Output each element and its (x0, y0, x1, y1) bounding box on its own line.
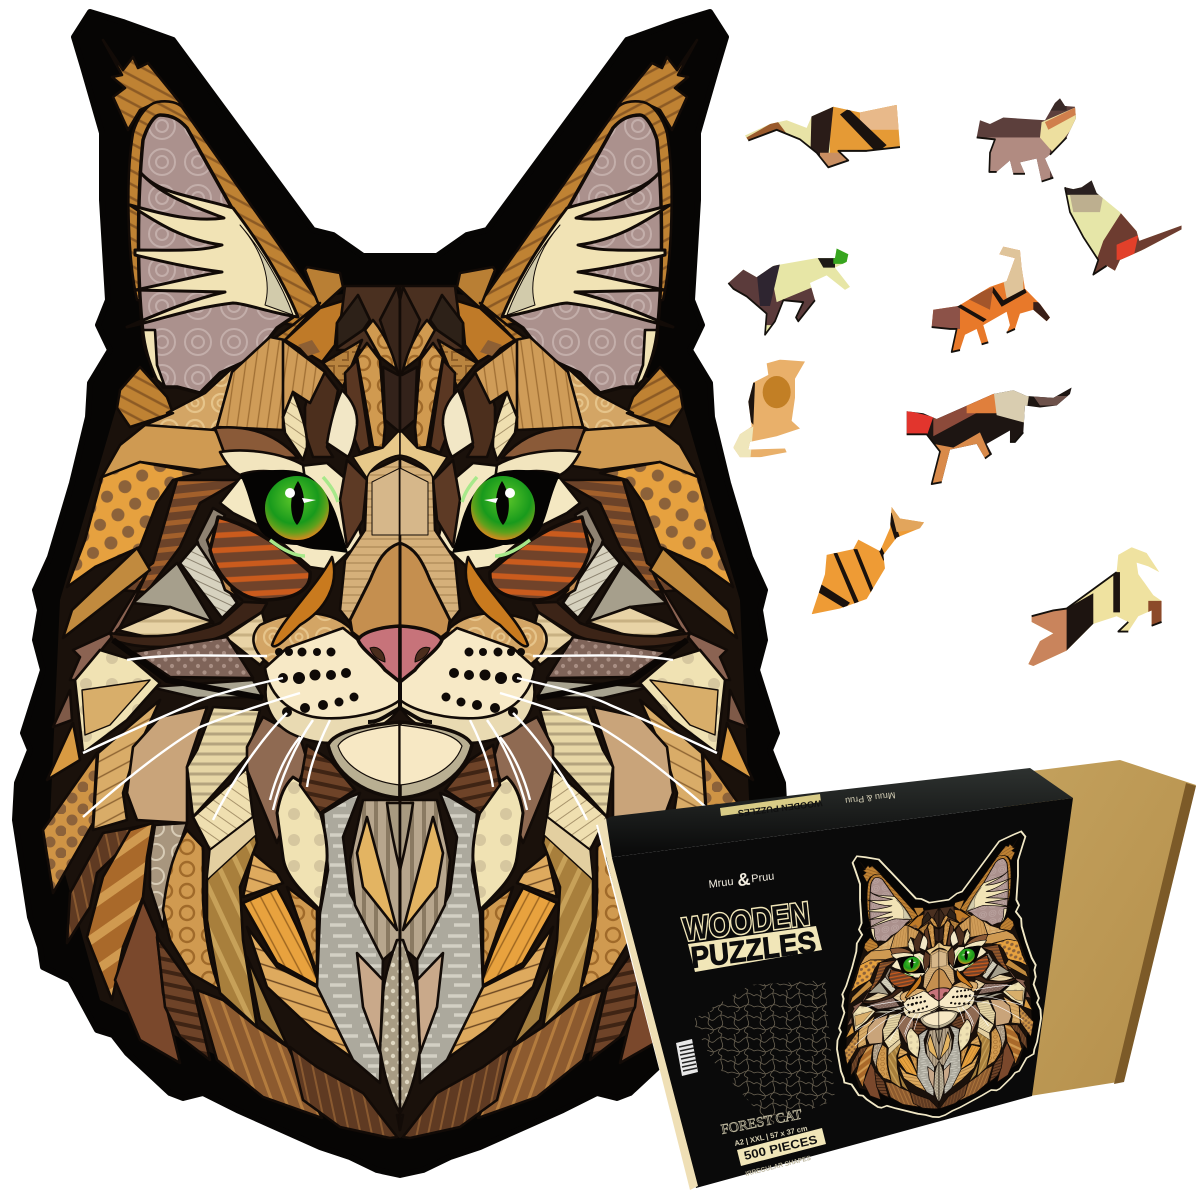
swirl orange leaf (287, 887, 317, 973)
cream tuft join (207, 817, 256, 880)
mauve fur strip (70, 573, 147, 680)
mouth line (368, 682, 400, 722)
eye outline (240, 470, 348, 553)
spotted side (67, 462, 200, 587)
black cheek line (113, 640, 263, 698)
interior dark base (50, 286, 400, 1138)
muzzle cream (265, 628, 400, 718)
kraft right edge (1114, 783, 1196, 1084)
brow fan (215, 427, 298, 458)
crown cream (353, 432, 400, 478)
muzzle top swirl (253, 613, 357, 665)
ear tip fur (103, 40, 182, 130)
brown stripe band (117, 480, 240, 592)
right half of cat face (mirrored) (400, 40, 757, 1138)
black puzzle outline (15, 12, 785, 1175)
highlight (285, 488, 295, 498)
bottom brown tip (397, 1115, 400, 1130)
box art cat (837, 828, 1041, 1133)
kraft sleeve (1000, 760, 1196, 1096)
cat art (837, 828, 1041, 1133)
ear cream tufts (127, 172, 298, 327)
nose leather (358, 626, 400, 682)
forehead cream leaf (327, 390, 357, 457)
orange leaf (47, 723, 80, 780)
tan stripe lower (283, 340, 325, 417)
piece: orange cat tail up (930, 245, 1053, 356)
orange mottled fur (285, 298, 352, 362)
pieces badge (737, 1128, 826, 1166)
green lid glow (270, 477, 338, 556)
olive stripe leaf (207, 822, 257, 1027)
orange centre swirl (357, 817, 397, 930)
left half of cat face (43, 40, 400, 1138)
dark cheek band (110, 602, 267, 647)
side fur under ear (117, 367, 173, 427)
thin olive (247, 957, 288, 1047)
forehead maze tan band (265, 303, 320, 345)
pale grey stripes (180, 543, 237, 618)
mauve small leaf (53, 690, 72, 727)
grey cheek (133, 563, 213, 623)
dotted bottom (380, 940, 400, 1113)
ear tuft shade (240, 225, 293, 315)
grey swirl leaf (150, 823, 187, 927)
cream tuft (193, 768, 253, 850)
ampersand: & (736, 869, 751, 890)
lower lip (266, 657, 400, 743)
box white halo (596, 764, 1198, 1196)
lid brand: Mruu & Pruu (845, 790, 896, 806)
big dark forehead lobe (305, 373, 338, 457)
barcode (676, 1039, 698, 1076)
side nose brown (340, 460, 367, 547)
inner ear (138, 115, 293, 393)
piece: crouching cat (745, 105, 900, 166)
cat puzzle illustration (15, 12, 785, 1175)
maze patch (323, 340, 362, 387)
grey lower cheek (150, 680, 263, 698)
dark lobe near centre (345, 360, 370, 453)
column upper pattern (372, 468, 400, 535)
piece edges (728, 130, 1162, 632)
orange brown leaf (87, 823, 153, 1000)
taupe centre stripes (350, 800, 400, 960)
pupil (291, 481, 304, 525)
eye surround cream (220, 463, 363, 570)
dark brown leaf (115, 900, 180, 1063)
size text: A2 | XXL | 57 x 37 cm (734, 1124, 809, 1148)
striped band (243, 853, 283, 897)
piece: stretching cat (1028, 547, 1162, 666)
centre swirl stripe (357, 343, 385, 448)
cream dotted leaf (75, 650, 160, 753)
tan rim patch (207, 517, 242, 600)
chin rim (328, 722, 400, 798)
barcode bars (679, 1044, 697, 1071)
lower forehead band (100, 425, 235, 480)
plain tan fur (127, 707, 207, 823)
bottom dark fan (290, 1047, 397, 1138)
piece: black cat (906, 388, 1072, 483)
piece: fish (812, 507, 924, 614)
big swirl leaf (163, 830, 220, 990)
forest cat title: FOREST CAT (720, 1107, 804, 1138)
headline line 2: PUZZLES (689, 926, 817, 975)
piece: rat (733, 360, 805, 458)
mauve chest band (247, 717, 307, 843)
highlight small (302, 498, 316, 503)
striped tan fur (93, 700, 160, 830)
tan strip at lower leaf (82, 680, 150, 735)
orange streak (272, 557, 334, 646)
lower mauve leaf (357, 953, 383, 1053)
ear lower sliver (143, 330, 165, 387)
grey rim round patch (197, 508, 237, 618)
product box (596, 760, 1198, 1196)
striped dark leaf (157, 937, 210, 1060)
ear rim (128, 101, 320, 325)
barcode plate (676, 1039, 698, 1076)
grey chest band (317, 793, 383, 1083)
crown dark back (337, 286, 400, 350)
forehead striped leaf (283, 392, 307, 460)
headline: wooden puzzles (681, 895, 822, 975)
badge text: 500 PIECES (743, 1132, 819, 1163)
black front (606, 798, 1073, 1188)
piece: sitting cat (1065, 180, 1182, 272)
lower stripes fan (197, 990, 322, 1118)
tan vertical stripes (217, 337, 325, 430)
black lid (604, 768, 1073, 858)
headline line 1: WOODEN (681, 895, 811, 948)
tan pale band (117, 607, 213, 640)
centre dark cross (383, 367, 400, 432)
dotted orange leaf (43, 753, 97, 893)
puzzle pieces (727, 95, 1187, 670)
cream left edge (598, 818, 698, 1190)
crown swirl leaf (365, 320, 397, 370)
forehead column (340, 458, 400, 625)
mottled blobs (298, 340, 320, 356)
cream plate (688, 926, 822, 972)
ear base orange top (305, 267, 343, 308)
taupe centre leaf (387, 803, 400, 870)
striped long tan (247, 927, 355, 1060)
red-orange eye patch (210, 517, 310, 600)
nostril (370, 647, 385, 662)
badge plate (737, 1128, 826, 1166)
under chin brown (300, 745, 355, 813)
crown centre (380, 287, 400, 375)
brand name 2: Pruu (751, 870, 775, 885)
iris (265, 476, 329, 540)
lid text: WOODEN PUZZLES (737, 798, 823, 818)
mauve dotted cheek (133, 637, 253, 678)
piece: cat with green tip (728, 248, 850, 332)
tan fur strip one (63, 548, 150, 638)
nose bridge (350, 543, 400, 640)
puzzle piece map (692, 980, 835, 1125)
cream big petal (277, 777, 327, 910)
brand logo (708, 865, 775, 894)
forehead swirl patch (145, 340, 280, 440)
chin (338, 725, 400, 785)
brand name: Mruu (708, 876, 734, 891)
small muzzle side stripes (225, 612, 272, 665)
upper brow cream (220, 451, 305, 480)
whisker dots (275, 648, 358, 717)
whiskers (83, 655, 330, 820)
lid label bar (720, 794, 821, 816)
cream striped fur (187, 707, 260, 817)
piece: walking mauve cat (976, 98, 1076, 182)
irregular shapes: IRREGULAR SHAPES (745, 1155, 812, 1178)
cream outline (837, 828, 1041, 1133)
crown facet (337, 295, 370, 348)
dark brown stripe leaf (67, 825, 147, 943)
orange striped leaf (243, 888, 320, 987)
